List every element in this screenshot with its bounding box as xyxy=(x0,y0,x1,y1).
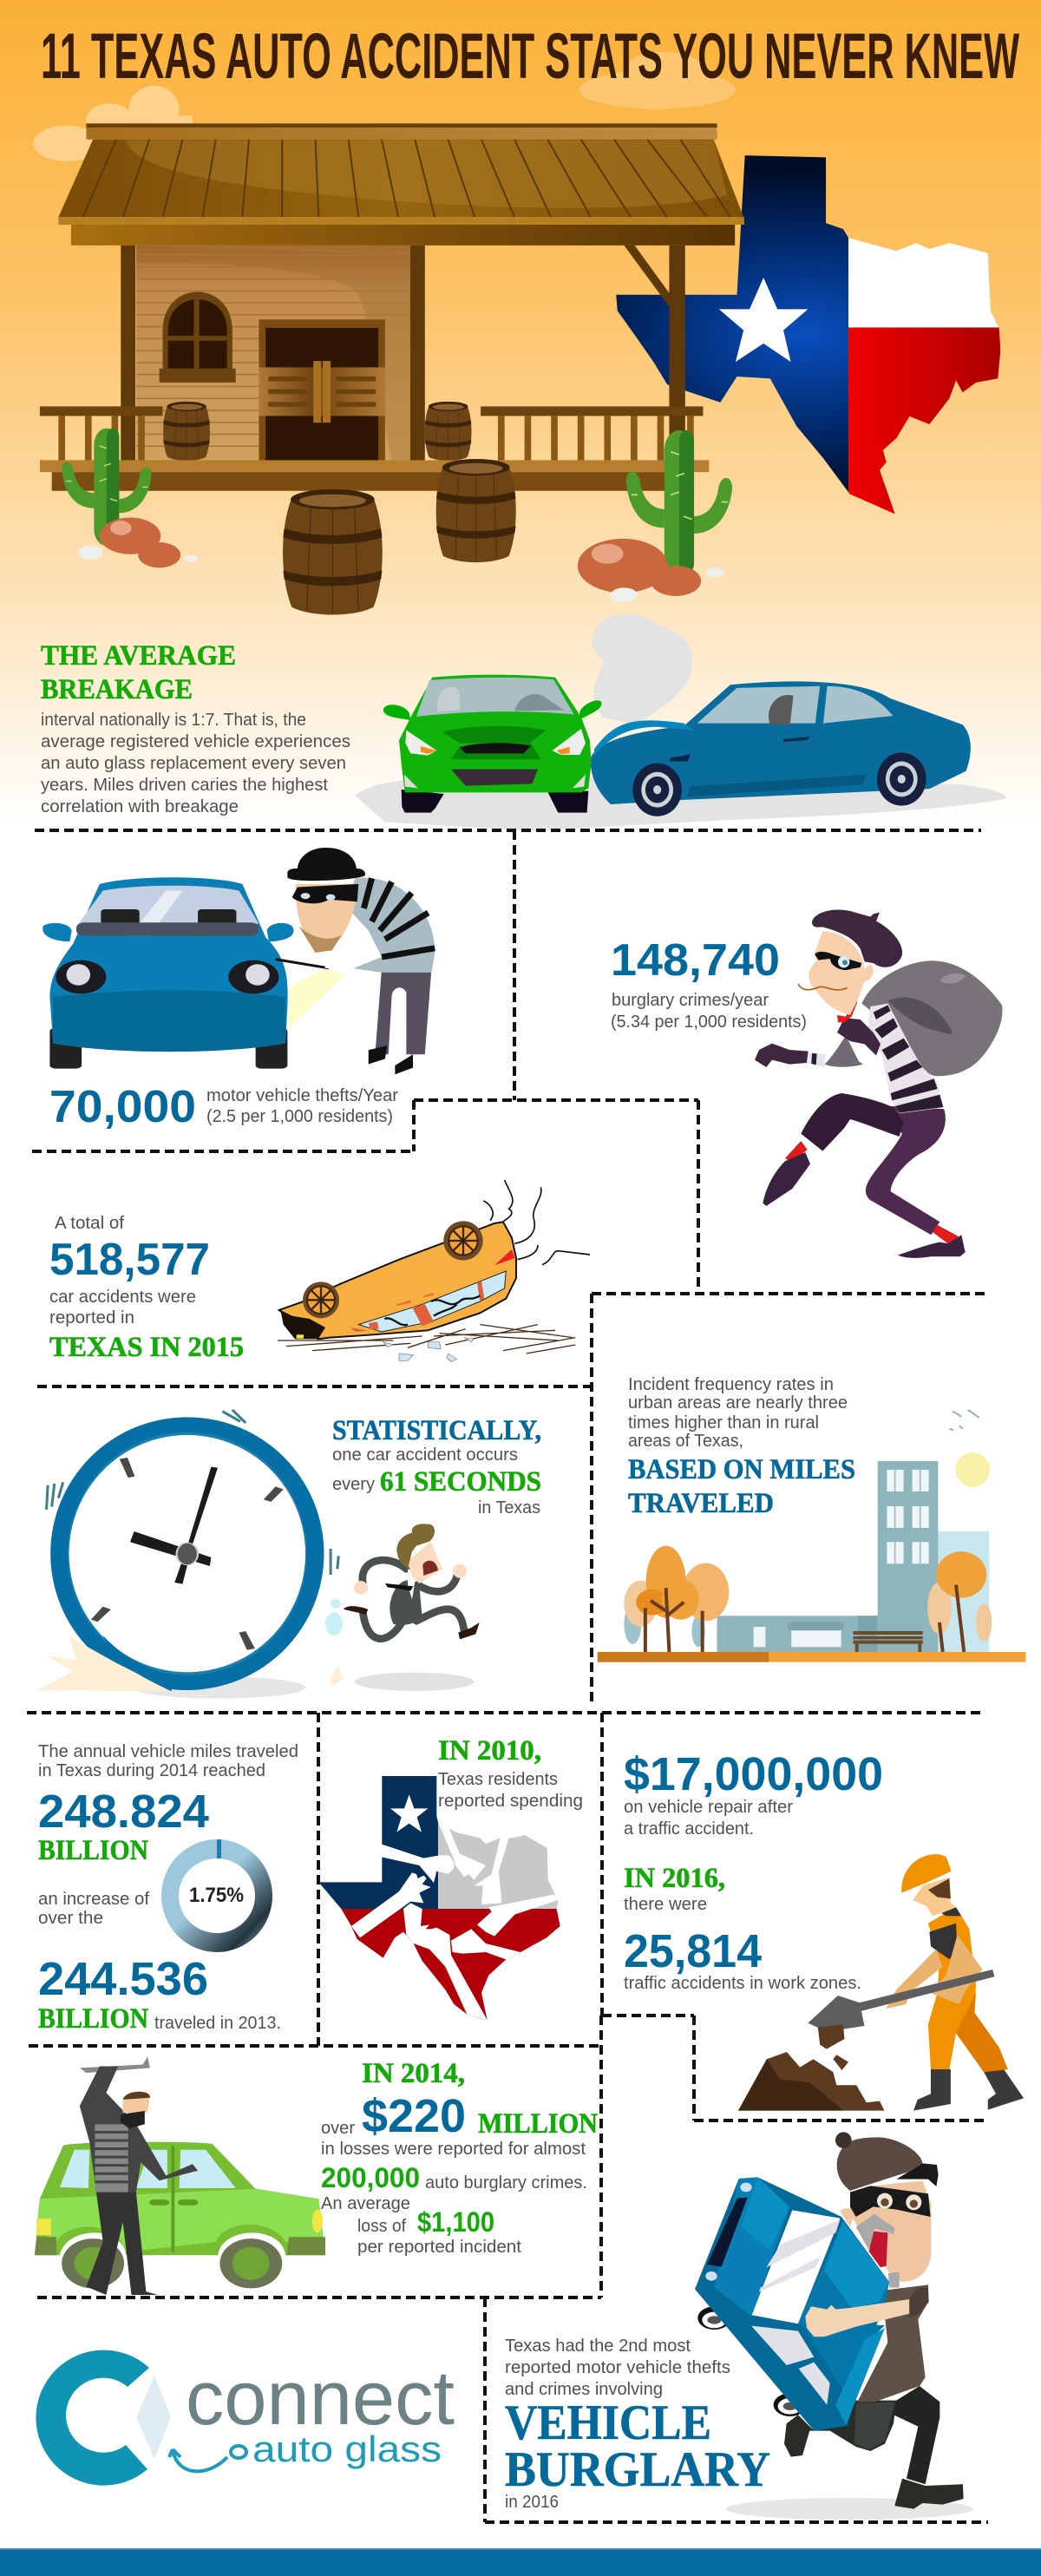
text block: average loss: $1,100 xyxy=(417,2206,494,2238)
statistic: 244.536 billion xyxy=(38,1953,281,2035)
heading: BASED ON MILES xyxy=(628,1454,855,1485)
statistic: 200,000 xyxy=(321,2162,587,2193)
panel: urban incident rates xyxy=(598,1375,1025,1662)
text block: reported motor vehicle thefts xyxy=(505,2358,730,2377)
text block: in 2016 xyxy=(505,2493,559,2512)
logo: connect auto glass: connect xyxy=(186,2355,455,2441)
text block: times higher than in rural xyxy=(628,1413,819,1432)
panel: vehicle repair and work zones xyxy=(624,1748,1024,2111)
text block: average loss: An average xyxy=(321,2194,410,2213)
heading: BREAKAGE xyxy=(41,674,193,705)
icon: C mark xyxy=(36,2350,246,2486)
text block: (2.5 per 1,000 residents) xyxy=(206,1107,393,1126)
text block: every 61 seconds: every xyxy=(332,1475,375,1494)
statistic: 70,000: 70,000 xyxy=(49,1082,196,1132)
statistic: 248.824 billion: BILLION xyxy=(38,1835,148,1866)
Texas flag map xyxy=(611,151,1008,519)
icon: Texas map with reaching hands xyxy=(318,1776,560,2020)
text block: areas of Texas, xyxy=(628,1432,743,1451)
illustration: burglar with sack xyxy=(755,910,1003,1258)
text block: motor vehicle thefts/Year xyxy=(206,1086,398,1105)
panel: burglary crimes xyxy=(611,910,1003,1258)
heading: THE AVERAGE xyxy=(41,640,236,672)
text block: and crimes involving xyxy=(505,2380,663,2399)
illustration: thief and blue car xyxy=(43,848,435,1074)
text block: Texas residents xyxy=(438,1770,558,1789)
text block: average loss: per reported incident xyxy=(357,2238,521,2257)
panel: annual vehicle miles xyxy=(38,1742,298,2035)
logo: connect auto glass xyxy=(36,2350,455,2486)
barrels xyxy=(283,459,516,614)
text block: years. Miles driven caries the highest xyxy=(41,776,328,795)
cacti and rocks xyxy=(62,429,732,602)
panel: spending in 2010 xyxy=(318,1735,583,2020)
text block: an auto glass replacement every seven xyxy=(41,754,346,773)
text block: reported spending xyxy=(438,1792,583,1811)
illustration: car crash xyxy=(355,614,1006,831)
text block: urban areas are nearly three xyxy=(628,1393,848,1413)
statistic: 244.536 billion: BILLION xyxy=(38,2003,148,2035)
heading: TRAVELED xyxy=(628,1488,774,1519)
statistic: 244.536 billion: 244.536 xyxy=(38,1953,208,2005)
panel: motor vehicle thefts xyxy=(43,848,435,1132)
text block: traffic accidents in work zones. xyxy=(624,1974,861,1993)
illustration: burglar with crowbar at green car xyxy=(35,2056,325,2295)
text block: one car accident occurs xyxy=(332,1445,518,1465)
text block: an increase of xyxy=(38,1890,149,1909)
statistic: 248.824 billion: 248.824 xyxy=(38,1786,209,1838)
text block: over the xyxy=(38,1909,103,1928)
text block: A total of xyxy=(55,1214,124,1233)
text block: The annual vehicle miles traveled xyxy=(38,1742,298,1761)
panel: auto burglary 2014 xyxy=(35,2056,598,2295)
text block: in Texas during 2014 reached xyxy=(38,1761,265,1780)
statistic: 248.824 billion xyxy=(38,1786,209,1866)
text block xyxy=(38,1742,298,1780)
statistic: 25,814: 25,814 xyxy=(624,1925,762,1977)
text block xyxy=(438,1770,583,1811)
text block xyxy=(505,2337,730,2399)
background gradient xyxy=(0,0,1041,824)
text block: (5.34 per 1,000 residents) xyxy=(611,1013,807,1032)
text block: burglary crimes/year xyxy=(612,991,769,1010)
footer bar xyxy=(0,2548,1041,2576)
text block: interval nationally is 1:7. That is, the xyxy=(41,711,306,730)
statistic: over $220 million: $220 xyxy=(362,2090,466,2142)
statistic: $17,000,000: $17,000,000 xyxy=(624,1748,883,1800)
panel: average breakage xyxy=(41,614,1006,831)
illustration: running clock xyxy=(36,1410,338,1699)
saloon building xyxy=(40,123,744,491)
text block xyxy=(611,991,807,1032)
statistic: over $220 million: over xyxy=(321,2119,355,2138)
statistic: over $220 million: MILLION xyxy=(478,2108,598,2140)
heading: BURGLARY xyxy=(505,2442,770,2497)
statistic: 200,000: 200,000 xyxy=(321,2162,420,2193)
scene: saloon, Texas flag and desert xyxy=(40,123,1008,614)
logo: connect auto glass: auto glass xyxy=(252,2429,442,2469)
clouds xyxy=(33,52,736,161)
text block: average loss: loss of xyxy=(357,2217,406,2236)
heading: VEHICLE xyxy=(505,2396,711,2450)
heading: IN 2010, xyxy=(438,1735,541,1766)
text block xyxy=(628,1375,848,1451)
text block: there were xyxy=(624,1895,707,1914)
text block: car accidents were xyxy=(49,1288,196,1307)
text block: in losses were reported for almost xyxy=(321,2140,586,2159)
panel: vehicle burglary xyxy=(505,2132,972,2520)
panel: accident every 61 seconds xyxy=(36,1410,541,1699)
donut chart: 1.75% xyxy=(161,1839,272,1952)
illustration: thief carrying car xyxy=(695,2132,972,2520)
statistic: 148,740: 148,740 xyxy=(611,935,780,986)
text block: Incident frequency rates in xyxy=(628,1375,834,1394)
illustration: overturned car xyxy=(278,1180,590,1361)
heading xyxy=(505,2396,770,2497)
heading xyxy=(41,640,236,705)
text block: reported in xyxy=(49,1308,134,1327)
illustration: city with autumn trees xyxy=(598,1410,1025,1662)
text block: a traffic accident. xyxy=(624,1819,754,1839)
heading xyxy=(628,1454,855,1519)
text block xyxy=(624,1798,793,1839)
illustration: construction worker digging xyxy=(738,1854,1024,2111)
statistic: 200,000: auto burglary crimes. xyxy=(425,2173,587,2193)
text block: correlation with breakage xyxy=(41,797,239,816)
text block xyxy=(41,711,350,816)
heading: IN 2016, xyxy=(624,1863,725,1894)
statistic: 244.536 billion: traveled in 2013. xyxy=(154,2014,281,2033)
text block xyxy=(49,1288,196,1327)
text block: Texas had the 2nd most xyxy=(505,2337,691,2356)
text block: every 61 seconds: 61 SECONDS xyxy=(380,1466,541,1498)
illustration: running man xyxy=(325,1524,480,1691)
text block: every 61 seconds: in Texas xyxy=(478,1498,540,1517)
heading: IN 2014, xyxy=(362,2058,465,2089)
statistic: over $220 million xyxy=(321,2090,598,2142)
panel: total car accidents xyxy=(49,1180,590,1363)
heading: STATISTICALLY, xyxy=(332,1415,541,1446)
text block: average registered vehicle experiences xyxy=(41,732,350,751)
text block xyxy=(38,1890,149,1928)
text block: every 61 seconds xyxy=(332,1466,541,1517)
donut chart: 1.75%: 1.75% xyxy=(189,1884,244,1907)
statistic: 518,577: 518,577 xyxy=(49,1235,210,1285)
text block xyxy=(206,1086,398,1126)
text block: on vehicle repair after xyxy=(624,1798,793,1817)
text block: average loss xyxy=(321,2194,521,2257)
heading: TEXAS IN 2015 xyxy=(49,1332,244,1363)
